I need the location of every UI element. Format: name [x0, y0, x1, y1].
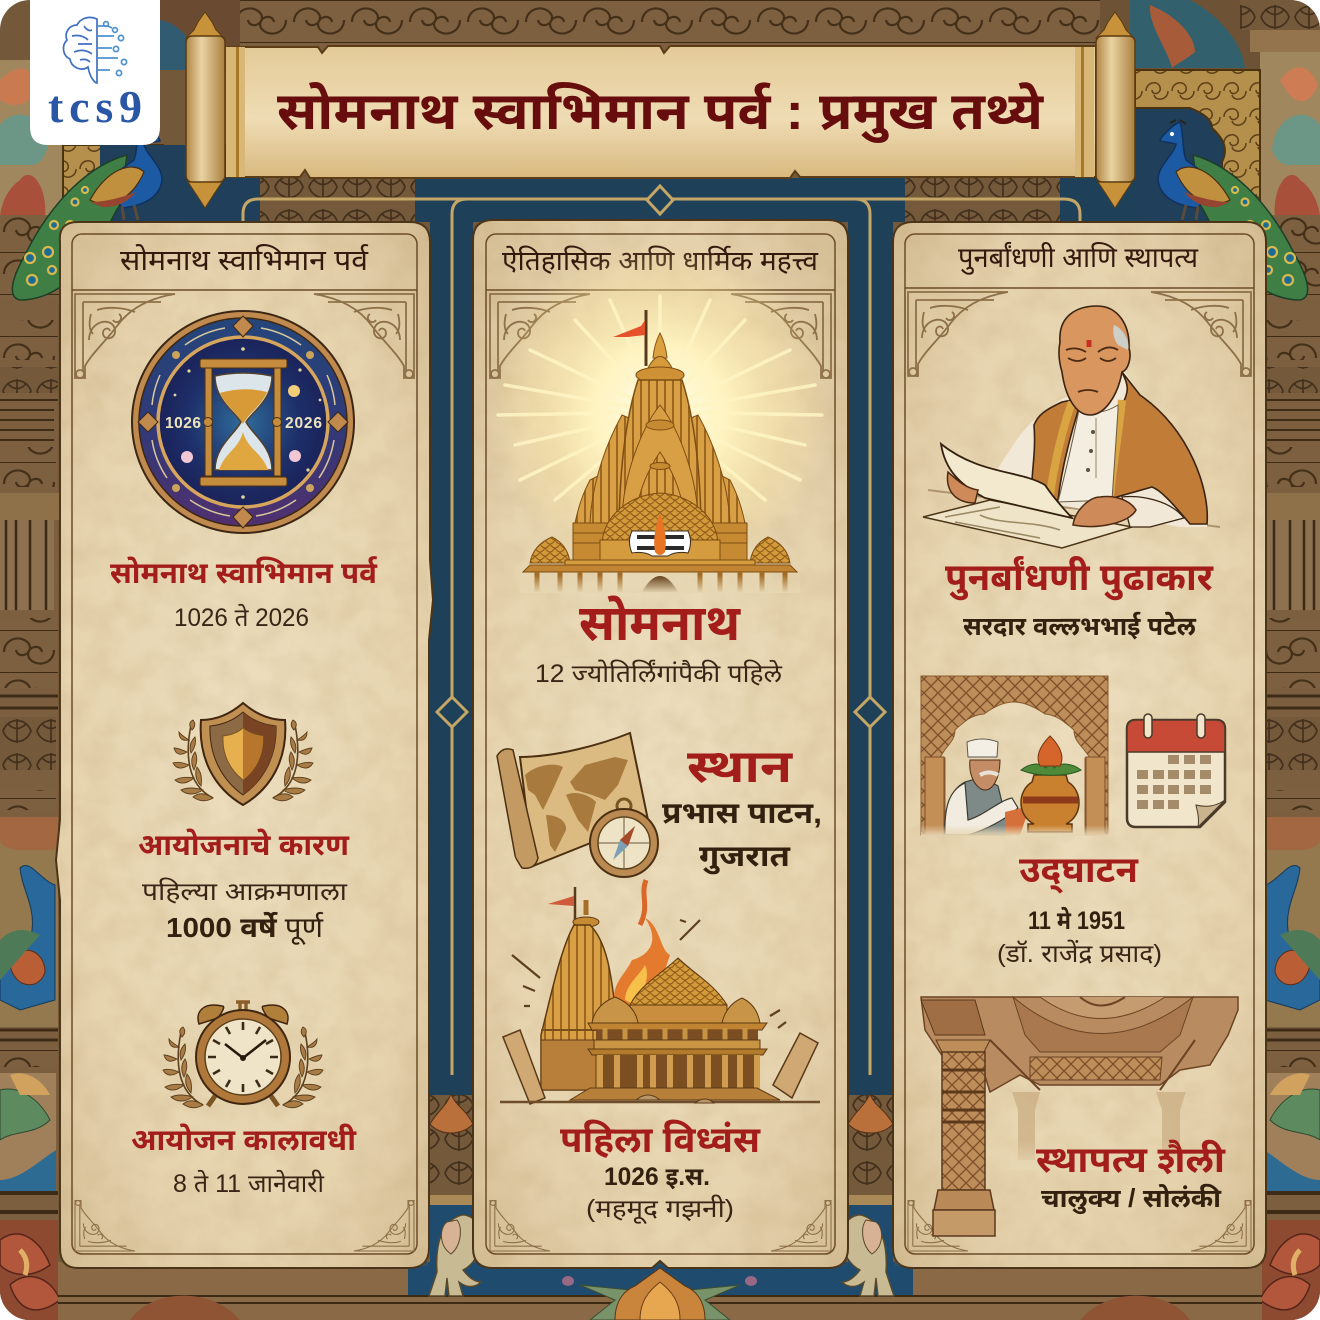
jyotirlinga line: 12 ज्योतिर्लिंगांपैकी पहिले	[535, 658, 783, 688]
corner ornaments	[75, 294, 414, 1251]
tripundra mark	[630, 531, 690, 556]
roller: right	[1096, 12, 1135, 208]
panel heading: ऐतिहासिक आणि धार्मिक महत्त्व	[502, 245, 819, 276]
medallion years: 1026	[165, 415, 201, 432]
panel heading: सोमनाथ स्वाभिमान पर्व	[120, 244, 369, 277]
destruction year: 1026 इ.स.	[604, 1163, 710, 1191]
icon: alarm clock with laurel	[163, 1002, 323, 1108]
icon: left peacock	[12, 120, 162, 300]
outer spires	[575, 475, 745, 523]
icon: shield with laurel	[173, 703, 313, 805]
location line one: प्रभास पाटन,	[662, 797, 822, 830]
logo wordmark: tcs9	[48, 81, 142, 132]
panel heading: पुनर्बांधणी आणि स्थापत्य	[958, 241, 1199, 275]
reason line one: पहिल्या आक्रमणाला	[142, 877, 348, 906]
icon: right elephant	[839, 1215, 894, 1296]
icon: hourglass medallion	[132, 311, 354, 533]
title scroll banner	[186, 12, 1135, 208]
heading: event: सोमनाथ स्वाभिमान पर्व	[110, 556, 378, 590]
destruction attacker: (महमूद गझनी)	[586, 1194, 734, 1224]
duration dates: 8 ते 11 जानेवारी	[173, 1168, 325, 1198]
location line two: गुजरात	[699, 840, 792, 875]
icon: map and compass	[497, 733, 658, 877]
heading: reconstruction initiative: पुनर्बांधणी पुढाकार	[945, 555, 1214, 601]
heading: Somnath: सोमनाथ	[579, 595, 741, 651]
event years: 1026 ते 2026	[174, 602, 309, 632]
background: bottom band and lotus	[58, 1205, 1262, 1320]
temple base	[573, 523, 747, 561]
reason line two: 1000 वर्षे पूर्ण	[166, 911, 324, 945]
icon: Somnath temple	[490, 242, 830, 593]
reconstruction leader: सरदार वल्लभभाई पटेल	[963, 611, 1196, 641]
background: teal centre and carved blocks	[260, 178, 1140, 1222]
panel: right column	[893, 222, 1266, 1268]
architecture names: चालुक्य / सोलंकी	[1041, 1183, 1222, 1214]
gold connector lines	[243, 186, 1080, 1075]
heading: reason: आयोजनाचे कारण	[138, 827, 350, 862]
corner ornaments	[908, 292, 1251, 1251]
heading: location: स्थान	[687, 740, 793, 792]
illustration: carved pillar and ceiling	[921, 997, 1238, 1236]
heading: inauguration: उद्‌घाटन	[1019, 849, 1139, 893]
heading: first destruction: पहिला विध्वंस	[560, 1119, 761, 1160]
icon: brain circuit	[63, 17, 127, 83]
title: सोमनाथ स्वाभिमान पर्व : प्रमुख तथ्ये	[277, 82, 1044, 144]
medallion years	[166, 417, 322, 428]
icon: ruined temple	[500, 880, 820, 1104]
corner ornaments	[490, 294, 831, 1251]
medallion years: 2026	[285, 415, 322, 432]
inauguration guest: (डॉ. राजेंद्र प्रसाद)	[997, 939, 1162, 968]
heading: architecture style: स्थापत्य शैली	[1036, 1138, 1226, 1180]
illustration: Sardar Patel reviewing plans	[923, 306, 1220, 548]
heading: duration: आयोजन कालावधी	[131, 1123, 357, 1157]
background: top corner murals	[0, 0, 1320, 220]
icon: calendar	[1127, 714, 1225, 827]
illustration: arch and kalash	[921, 676, 1109, 836]
panel: left column	[56, 222, 433, 1268]
logo	[30, 0, 160, 145]
icon: left elephant	[429, 1215, 484, 1296]
icon: right peacock	[1158, 120, 1308, 300]
inauguration date: 11 मे 1951	[1028, 906, 1125, 935]
background: top carved band	[240, 0, 1100, 50]
background: side columns	[0, 300, 1320, 1320]
temple flag	[644, 310, 648, 366]
panel: centre column	[473, 220, 848, 1268]
roller: left	[186, 12, 225, 208]
background: gold frames	[0, 70, 1320, 305]
